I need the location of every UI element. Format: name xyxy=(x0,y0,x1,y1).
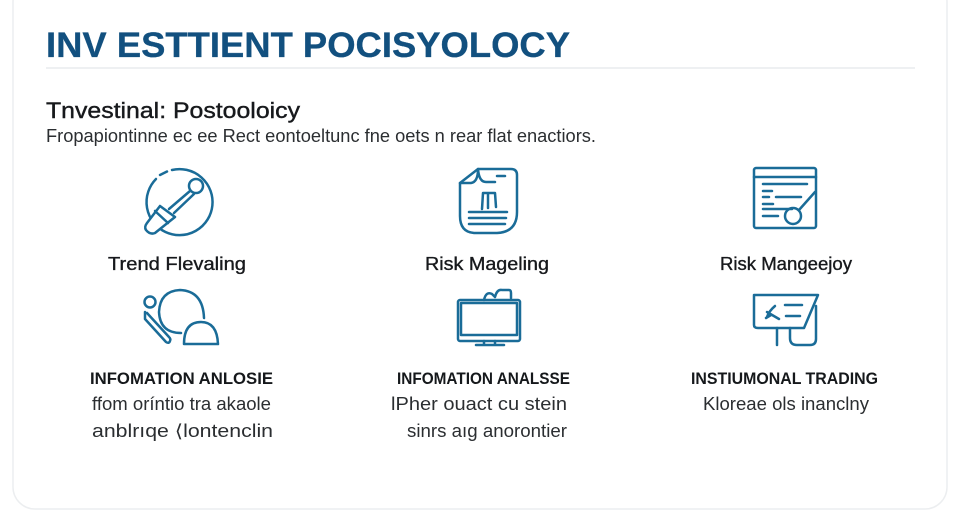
title: INV ESTTIENT POCISYOLOCY xyxy=(46,26,570,65)
subtitle heading: Tnvestinal: Postoolοicy xyxy=(46,98,300,123)
column heading: Instiumonal Trading: INSTIUMONAL TRADING xyxy=(691,370,878,388)
body text: middle column xyxy=(391,394,567,441)
icon: presentation board xyxy=(754,295,818,345)
icon: monitor xyxy=(458,290,520,345)
body text: middle column: sinrs aıg anorontier xyxy=(407,421,567,441)
label: Risk Mangeejoy: Risk Mangeejoy xyxy=(720,254,852,274)
column heading: Infomation Anlosie: INFOMATION ANLOSIE xyxy=(90,370,273,388)
icon: ball and dome xyxy=(144,290,218,344)
icon: document xyxy=(460,169,517,233)
label: Trend Flevaling: Trend Flevaling xyxy=(108,254,246,274)
body text: right column: Kloreae ols inanclny xyxy=(703,394,869,414)
body text: left column: ffom oríntio tra akaole xyxy=(92,394,271,414)
icon: browser window with magnifier xyxy=(754,168,816,228)
intro text: Fropapiontinne ec ee Rect eontoeltunc fne oets n rear flat enactiors. xyxy=(46,126,596,146)
body text: middle column: lPher ouact cu stein xyxy=(391,394,567,414)
body text: left column: anblrıqe ⟨lontenclin xyxy=(92,421,273,441)
label: Risk Mageling: Risk Mageling xyxy=(425,254,549,274)
column heading: Infomation Analsse: INFOMATION ANALSSE xyxy=(397,370,570,388)
icon: magnifier in circle xyxy=(145,169,213,235)
body text: left column xyxy=(92,394,273,441)
